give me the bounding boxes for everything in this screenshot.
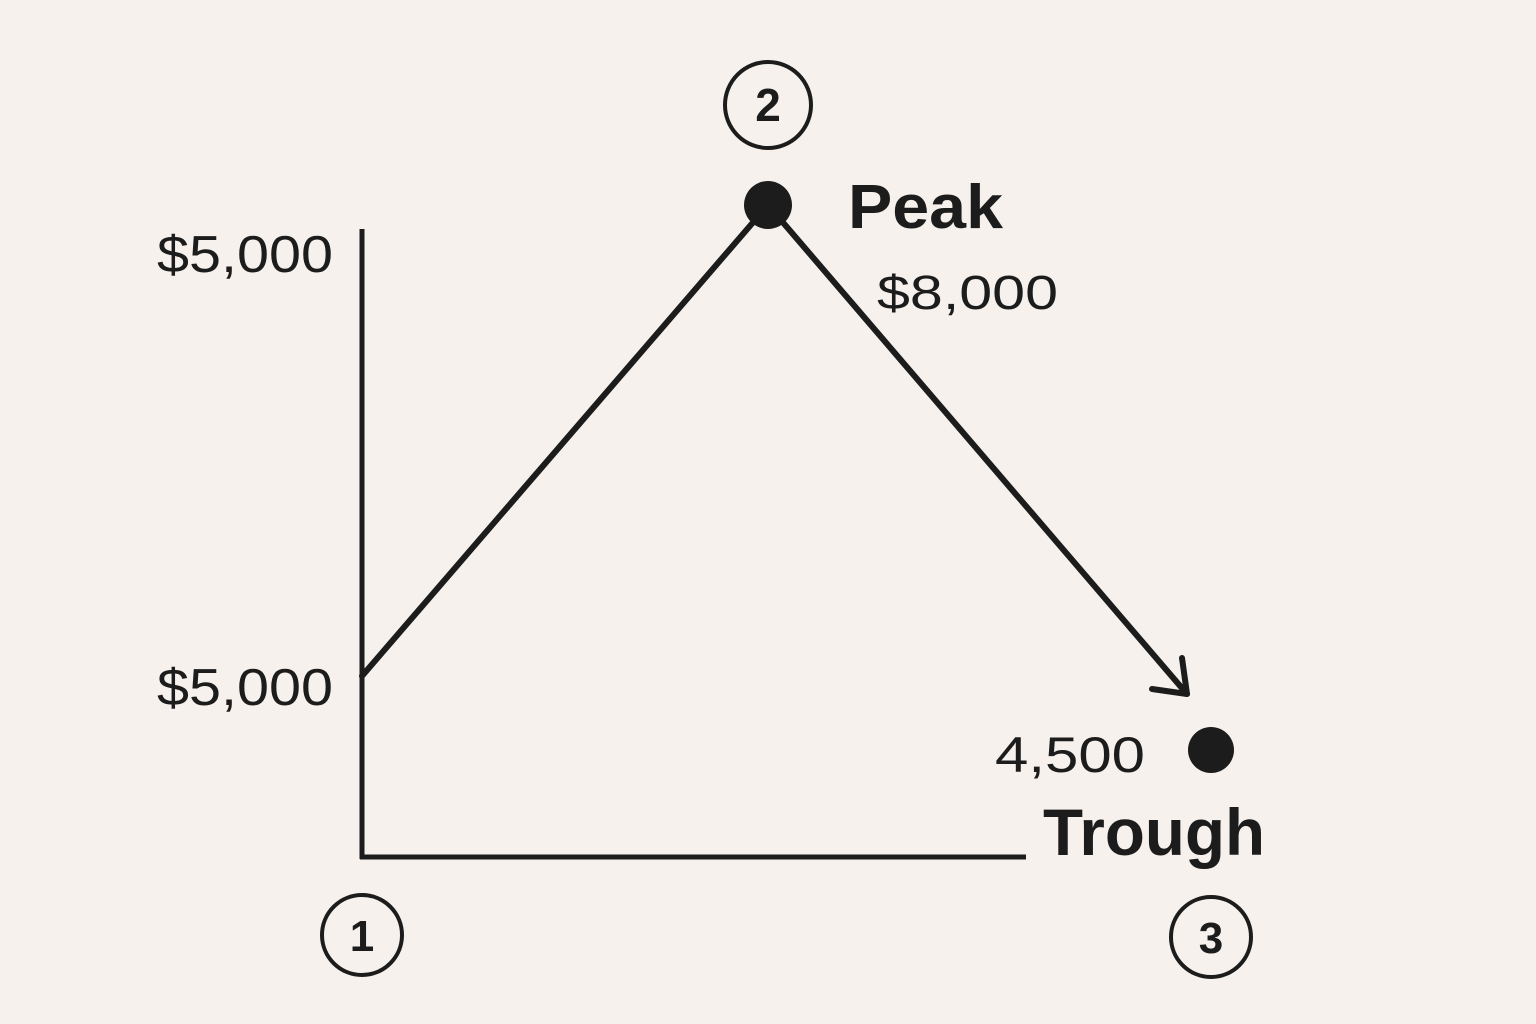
marker 3 (1171, 897, 1251, 977)
trough dot (1188, 727, 1234, 773)
line chart: rise to peak and fall to trough (362, 205, 1187, 694)
axes (360, 229, 1026, 859)
label 4,500: 4,500 (995, 727, 1145, 783)
label bottom $5,000: $5,000 (157, 659, 333, 717)
peak dot (744, 181, 792, 229)
marker 1: 1 (350, 912, 374, 961)
marker 2: 2 (755, 79, 781, 131)
label $8,000: $8,000 (877, 267, 1058, 320)
marker 3: 3 (1199, 914, 1223, 963)
label top $5,000: $5,000 (157, 226, 333, 284)
label Peak: Peak (848, 173, 1004, 242)
marker 1 (322, 895, 402, 975)
label Trough: Trough (1043, 795, 1265, 869)
marker 2 (725, 62, 811, 148)
